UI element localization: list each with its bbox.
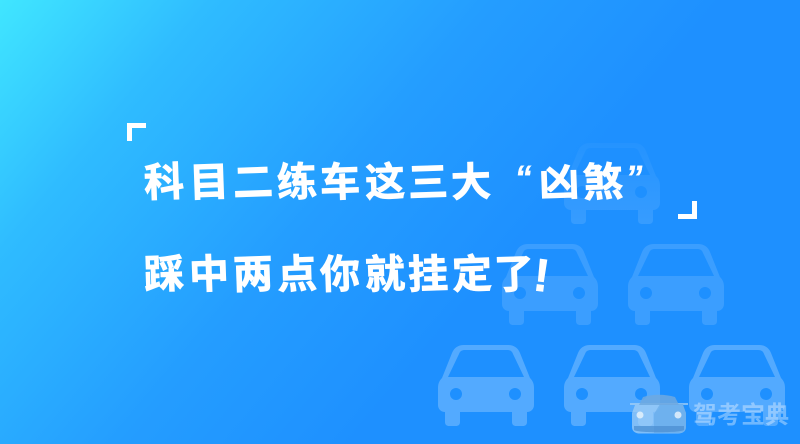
headline line two: 了 xyxy=(493,252,535,298)
headline line two: 就 xyxy=(364,252,406,298)
headline line one: 这 xyxy=(364,160,406,206)
icon: front view car logo xyxy=(630,394,688,434)
headline line two: 挂 xyxy=(407,252,449,298)
headline line one: 车 xyxy=(319,160,361,206)
headline line one xyxy=(143,159,646,206)
headline line one: 二 xyxy=(232,160,274,206)
headline line one: 目 xyxy=(188,160,230,206)
headline line two: 点 xyxy=(276,252,318,298)
closing corner bracket xyxy=(678,201,697,219)
headline line one: 练 xyxy=(276,160,318,206)
headline line one: “ xyxy=(512,159,535,197)
headline line one: 凶 xyxy=(538,160,580,206)
car icon: middle row left xyxy=(502,244,598,325)
car icon: bottom row right xyxy=(689,345,785,426)
headline line one: 三 xyxy=(407,160,449,206)
headline line one: ” xyxy=(623,159,646,197)
headline line two: 踩 xyxy=(143,252,185,298)
car icon: bottom row middle xyxy=(564,345,660,426)
headline line one: 大 xyxy=(450,160,492,206)
watermark logo xyxy=(630,394,789,434)
headline line two: ! xyxy=(531,248,552,302)
car icon: top row xyxy=(564,143,660,224)
headline line one: 煞 xyxy=(582,160,624,206)
logo wordmark: 驾考宝典 xyxy=(693,402,789,429)
headline line two: 定 xyxy=(451,252,493,298)
car icon: bottom row left xyxy=(438,345,534,426)
car icon: middle row right xyxy=(628,244,724,325)
headline line one: 科 xyxy=(143,160,185,206)
headline line two: 你 xyxy=(319,252,361,298)
headline line two: 两 xyxy=(232,252,274,298)
opening corner bracket xyxy=(127,123,146,141)
headline line two: 中 xyxy=(188,252,230,298)
headline line two xyxy=(143,248,552,302)
